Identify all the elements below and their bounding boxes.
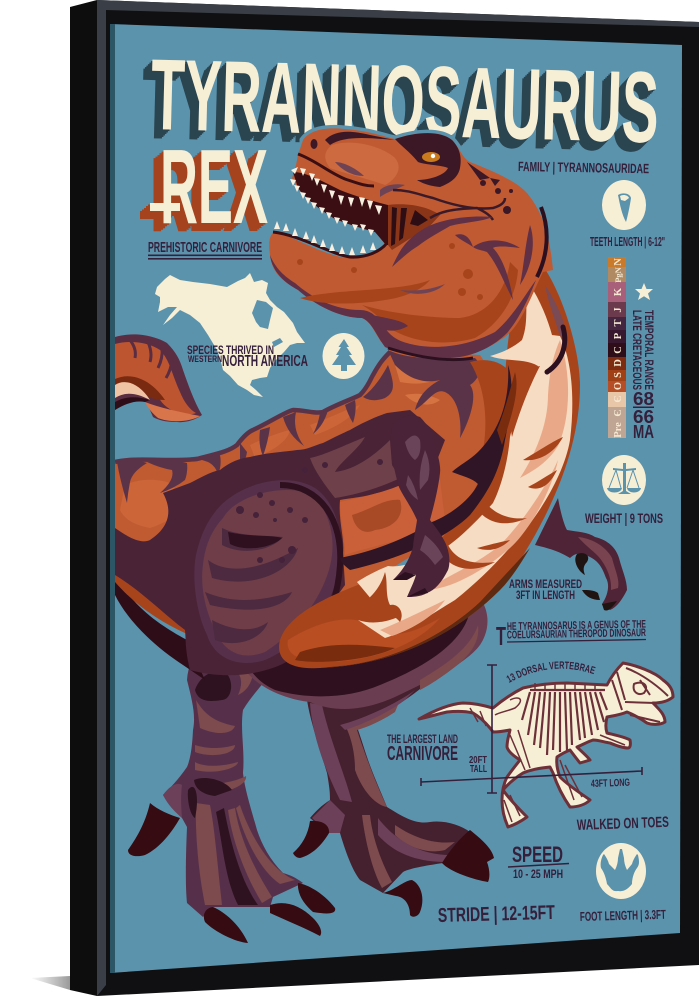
star (635, 283, 653, 300)
map label: NORTH AMERICA (222, 353, 308, 370)
speed (508, 842, 569, 881)
geologic timeline: P (613, 332, 624, 339)
geologic timeline: O (613, 382, 624, 390)
lower tail stripes (115, 575, 204, 678)
temporal range: 66 (633, 407, 654, 427)
temporal range (630, 310, 656, 442)
length label: 43FT LONG (591, 777, 630, 790)
temporal range: TEMPORAL RANGE (642, 310, 656, 390)
stride label: STRIDE | 12-15FT (438, 902, 555, 927)
largest land carnivore label: THE LARGEST LAND (387, 732, 458, 746)
neck (363, 350, 506, 446)
throat band (362, 262, 518, 342)
left leg (163, 669, 303, 917)
speed: SPEED (512, 842, 563, 867)
teeth (274, 167, 382, 255)
arms label (509, 577, 582, 602)
height label: TALL (470, 763, 487, 775)
claws (128, 803, 494, 943)
right leg (307, 685, 469, 893)
geologic timeline (608, 257, 626, 438)
map of North America (155, 273, 305, 397)
icon: tooth (602, 180, 646, 230)
tail tip (115, 334, 202, 422)
infographic poster: REX (160, 128, 268, 246)
nostril (310, 139, 318, 149)
height label: 20FT (469, 754, 487, 766)
head ridge and spots (325, 132, 513, 214)
near arm (391, 415, 449, 597)
Prehistoric carnivore label (148, 239, 262, 260)
height label (469, 754, 487, 775)
icon: footprint (596, 843, 646, 899)
icon: tree (322, 333, 364, 379)
geologic timeline: C (613, 346, 624, 354)
largest land carnivore label (387, 732, 458, 765)
Prehistoric carnivore label: PREHISTORIC CARNIVORE (148, 239, 262, 256)
belly (240, 598, 488, 709)
eye patch (395, 133, 461, 187)
temporal range: MA (633, 422, 654, 442)
geologic timeline: D (613, 359, 624, 367)
subtitle: Rex (150, 128, 268, 246)
geologic timeline: Є (613, 409, 624, 417)
speed: 10 - 25 MPH (513, 867, 563, 881)
map label: SPECIES THRIVED IN (187, 343, 274, 357)
geologic timeline: Є (613, 395, 624, 403)
mouth (293, 172, 392, 245)
thigh and flank (115, 410, 445, 675)
map label: WESTERN (188, 354, 222, 365)
geologic timeline: PgN (613, 266, 623, 283)
dorsal label: 13 DORSAL VERTEBRAE (506, 661, 596, 683)
dimension lines (421, 665, 642, 793)
cheek muscle lines (392, 217, 533, 300)
genus note: T (496, 621, 506, 651)
geologic timeline: J (613, 307, 624, 313)
temporal range: LATE CRETACEOUS (630, 310, 644, 390)
weight label: WEIGHT | 9 TONS (585, 510, 663, 526)
geologic timeline: N (613, 258, 624, 266)
geologic timeline: K (613, 287, 624, 296)
map label (187, 343, 308, 370)
chest and neck (279, 262, 580, 668)
far arm (535, 498, 627, 611)
arms label: ARMS MEASURED (509, 577, 582, 591)
icon: scales (602, 455, 646, 505)
eye (422, 152, 440, 162)
genus note (496, 619, 646, 651)
dinosaur (115, 128, 627, 943)
arms label: 3FT IN LENGTH (516, 588, 575, 602)
body back (115, 350, 486, 593)
snout highlight (325, 143, 399, 185)
jaw rim (270, 255, 536, 358)
geologic timeline: Pre (613, 422, 624, 438)
head (269, 128, 553, 360)
temporal range: 68 (633, 389, 654, 409)
cream stripes (357, 285, 572, 638)
geologic timeline: T (613, 319, 624, 327)
geologic timeline: S (613, 372, 624, 378)
skeleton (419, 663, 673, 827)
largest land carnivore label: CARNIVORE (387, 743, 458, 765)
